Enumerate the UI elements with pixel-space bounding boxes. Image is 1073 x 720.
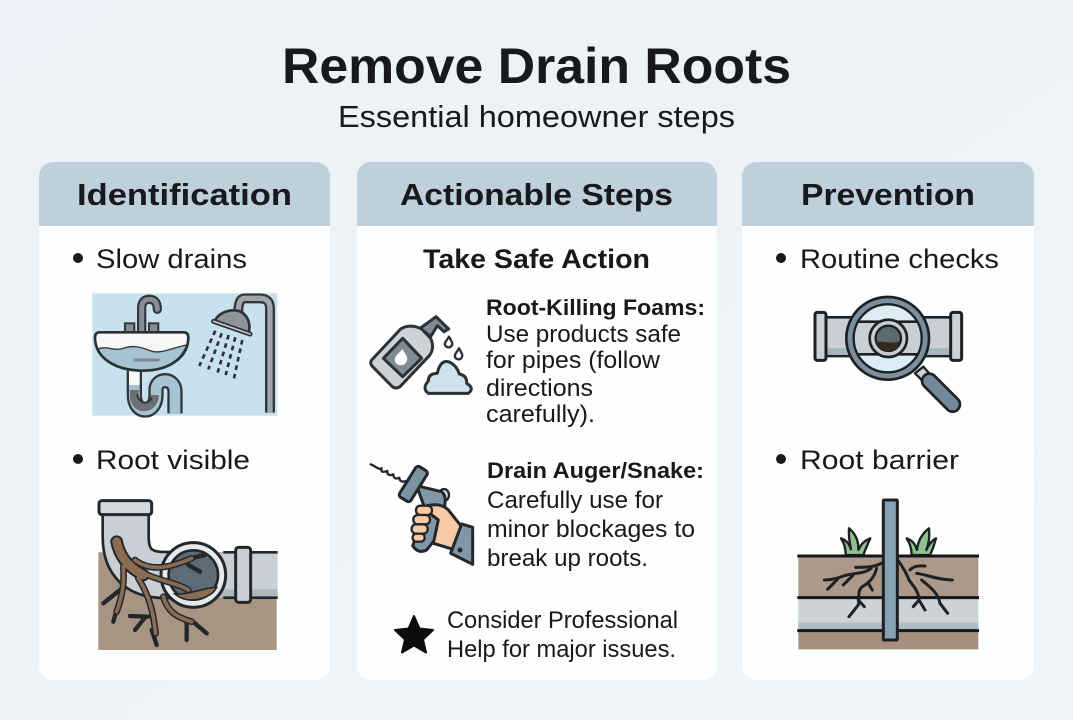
step text: drain auger: break up roots.: [487, 545, 648, 572]
icon: magnifier on pipe: [815, 297, 962, 404]
subheading: take safe action: Take Safe Action: [423, 244, 650, 274]
icon: drain auger in hand: [371, 464, 473, 564]
step text: root-killing foams: carefully).: [486, 401, 595, 428]
bullet: routine checks: Routine checks: [800, 244, 999, 274]
step text: drain auger: minor blockages to: [487, 516, 695, 543]
bullet: root barrier: Root barrier: [800, 445, 959, 475]
icon: root barrier: [797, 500, 979, 649]
panel: actionable steps: [357, 162, 717, 680]
heading: identification: Identification: [77, 177, 292, 212]
bullet: slow drains: Slow drains: [96, 244, 247, 274]
actionable steps header band: [357, 162, 717, 226]
icon: star: [395, 616, 433, 652]
icon: foam bottle: [371, 317, 471, 393]
step text: drain auger: [487, 458, 704, 572]
panel: identification: [39, 162, 330, 680]
icon: sink and shower: [92, 293, 277, 416]
subtitle: Essential homeowner steps: [338, 99, 735, 134]
identification header band: [39, 162, 330, 226]
step text: root-killing foams: directions: [486, 375, 593, 402]
prevention header band: [742, 162, 1034, 226]
step text: drain auger: Carefully use for: [487, 487, 663, 514]
callout: professional help: Help for major issues.: [447, 636, 676, 663]
panel: prevention: [742, 162, 1034, 680]
step text: root-killing foams: Root-Killing Foams:: [486, 295, 705, 320]
step text: root-killing foams: for pipes (follow: [486, 347, 661, 374]
callout: professional help: Consider Professional: [447, 607, 678, 634]
icon: roots in pipe: [98, 501, 278, 650]
step text: root-killing foams: [486, 295, 705, 428]
bullet: root visible: Root visible: [96, 445, 250, 475]
title: Remove Drain Roots: [282, 38, 791, 94]
heading: actionable steps: Actionable Steps: [400, 177, 673, 212]
heading: prevention: Prevention: [801, 177, 975, 212]
step text: drain auger: Drain Auger/Snake:: [487, 458, 704, 483]
step text: root-killing foams: Use products safe: [486, 321, 681, 348]
callout: professional help: [447, 607, 678, 663]
